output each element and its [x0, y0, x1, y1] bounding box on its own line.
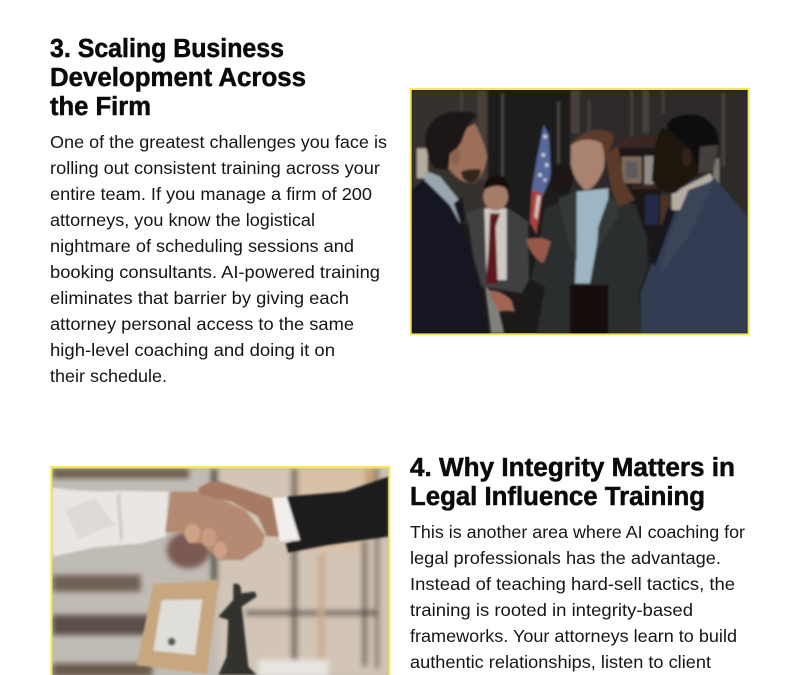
photo: handshake in a law office: [50, 466, 390, 675]
heading: section 4: Legal Influence Training: [410, 483, 705, 511]
window reflection: [417, 148, 428, 178]
white sleeve: [52, 487, 168, 557]
text block: section 4 body: authentic relationships, listen to client: [410, 652, 711, 672]
text block: section 4 body: [410, 522, 745, 672]
woman: [531, 195, 648, 334]
photo: three attorneys talking in an office: [410, 88, 750, 335]
text block: section 3 body: rolling out consistent training across your: [50, 158, 380, 178]
heading: section 4: 4. Why Integrity Matters in: [410, 454, 735, 482]
bookshelf: [616, 135, 658, 148]
left hand: [165, 492, 265, 560]
left man: [412, 179, 491, 335]
text block: section 3 body: attorney personal access to the same: [50, 314, 354, 334]
text block: section 3 body: nightmare of scheduling sessions and: [50, 236, 354, 256]
text block: section 4 body: This is another area where AI coaching for: [410, 522, 745, 542]
text block: section 3 body: high-level coaching and doing it on: [50, 340, 335, 360]
heading: section 3: 3. Scaling Business: [50, 35, 284, 63]
white cuff: [272, 497, 301, 542]
text block: section 3 body: eliminates that barrier by giving each: [50, 288, 349, 308]
framed certificate: [137, 580, 219, 674]
right man: [640, 177, 748, 334]
text block: section 3 body: attorneys, you know the logistical: [50, 210, 315, 230]
text block: section 4 body: legal professionals has the advantage.: [410, 548, 721, 568]
panel: section 4 text: [410, 454, 745, 672]
heading: section 4: [410, 454, 735, 511]
flag: [532, 125, 551, 197]
text block: section 3 body: their schedule.: [50, 366, 167, 386]
text block: section 4 body: training is rooted in integrity-based: [410, 600, 693, 620]
right thumb and hand: [198, 481, 280, 537]
black sleeve: [286, 477, 388, 553]
text block: section 3 body: entire team. If you manage a firm of 200: [50, 184, 372, 204]
text block: section 4 body: Instead of teaching hard-sell tactics, the: [410, 574, 735, 594]
text block: section 3 body: One of the greatest challenges you face is: [50, 132, 387, 152]
heading: section 3: the Firm: [50, 93, 151, 121]
text block: section 3 body: [50, 132, 387, 386]
text block: section 3 body: booking consultants. AI-powered training: [50, 262, 380, 282]
background man: [467, 207, 529, 293]
heading: section 3: [50, 35, 306, 121]
lady justice statue: [218, 584, 257, 675]
panel: section 3 text: [50, 35, 387, 386]
text block: section 4 body: frameworks. Your attorneys learn to build: [410, 626, 737, 646]
heading: section 3: Development Across: [50, 64, 306, 92]
